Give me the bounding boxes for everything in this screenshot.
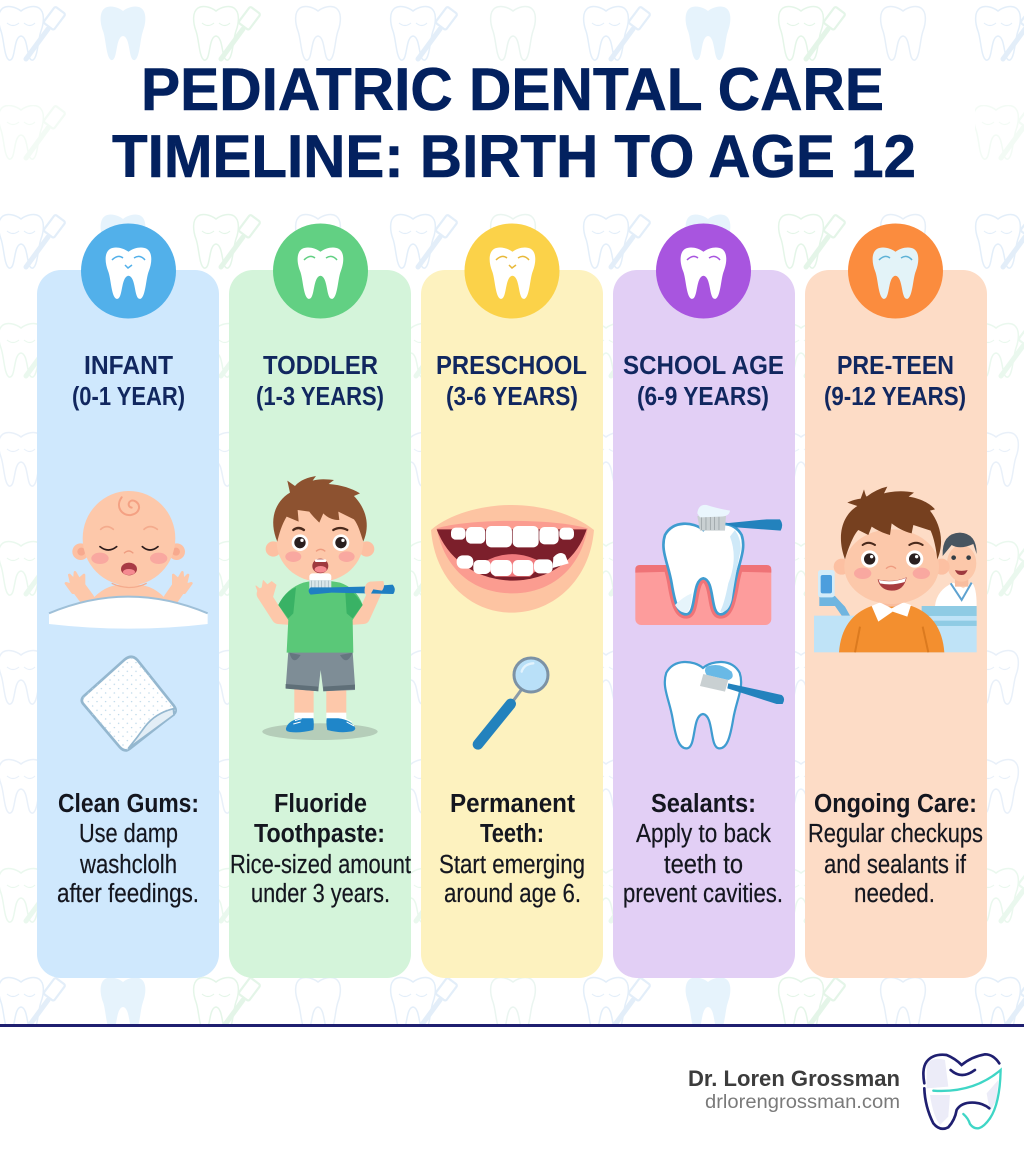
- title: [112, 56, 916, 190]
- toddler panel background: [229, 270, 411, 978]
- school age heading: [623, 352, 784, 411]
- school age tip text: prevent cavities.: [623, 880, 783, 908]
- toddler heading: [256, 352, 384, 411]
- panel: school age: [613, 224, 795, 978]
- icon: infant tooth badge: [81, 224, 176, 318]
- toddler tip text: Toothpaste:: [254, 820, 385, 848]
- illustration: smiling mouth with teeth: [431, 505, 594, 613]
- pre-teen heading: [824, 352, 966, 411]
- school age heading: (6-9 YEARS): [637, 383, 769, 411]
- infant tip text: Use damp: [79, 820, 178, 848]
- footer author name and website: Dr. Loren Grossman: [688, 1066, 900, 1091]
- panel: preschool: [421, 224, 603, 978]
- panel: pre-teen: [805, 224, 987, 978]
- school age heading: SCHOOL AGE: [623, 352, 784, 380]
- illustration: toddler brushing teeth: [256, 476, 395, 740]
- preschool tip text: Teeth:: [480, 820, 544, 848]
- footer author name and website: [688, 1066, 900, 1113]
- pre-teen tip text: Regular checkups: [808, 820, 983, 848]
- toddler tip text: [230, 790, 411, 908]
- pre-teen tip text: needed.: [854, 880, 935, 908]
- school age tip text: [623, 790, 783, 908]
- footer author name and website: drlorengrossman.com: [705, 1092, 900, 1113]
- icon: dental mirror: [478, 658, 548, 744]
- pre-teen tip text: Ongoing Care:: [814, 790, 977, 818]
- toddler tip text: under 3 years.: [251, 880, 390, 908]
- school age tip text: teeth to: [664, 851, 743, 879]
- toddler tip text: Rice-sized amount: [230, 851, 411, 879]
- illustration: sleeping baby: [49, 491, 208, 629]
- preschool heading: PRESCHOOL: [436, 352, 587, 380]
- toddler heading: TODDLER: [263, 352, 378, 380]
- pre-teen tip text: and sealants if: [824, 851, 967, 879]
- preschool tip text: [439, 790, 585, 908]
- icon: tooth logo: [923, 1054, 1001, 1129]
- infant tip text: after feedings.: [57, 880, 199, 908]
- infant tip text: Clean Gums:: [58, 790, 199, 818]
- school age tip text: Apply to back: [636, 820, 771, 848]
- infant heading: [72, 352, 185, 411]
- infant heading: INFANT: [84, 352, 173, 380]
- preschool heading: (3-6 YEARS): [446, 383, 578, 411]
- panel: infant: [37, 224, 219, 978]
- icon: pre-teen tooth badge: [848, 224, 943, 318]
- preschool tip text: Permanent: [450, 790, 575, 818]
- icon: washcloth: [82, 657, 176, 750]
- toddler tip text: Fluoride: [274, 790, 367, 818]
- infant heading: (0-1 YEAR): [72, 383, 185, 411]
- pre-teen panel background: [805, 270, 987, 978]
- preschool tip text: around age 6.: [444, 880, 581, 908]
- school age tip text: Sealants:: [651, 790, 756, 818]
- preschool tip text: Start emerging: [439, 851, 585, 879]
- icon: school age tooth badge: [656, 224, 751, 318]
- pre-teen heading: PRE-TEEN: [837, 352, 954, 380]
- title: PEDIATRIC DENTAL CARE: [141, 56, 884, 123]
- footer: [0, 1024, 1024, 1154]
- infant tip text: [57, 790, 199, 908]
- infant tip text: washclolh: [79, 851, 177, 879]
- illustration: pre-teen boy with dentist: [814, 487, 977, 652]
- school age panel background: [613, 270, 795, 978]
- illustration: sealant on molar: [665, 662, 784, 748]
- preschool panel background: [421, 270, 603, 978]
- icon: toddler tooth badge: [273, 224, 368, 318]
- title: TIMELINE: BIRTH TO AGE 12: [112, 123, 916, 190]
- illustration: tooth in gum with brush: [635, 505, 782, 625]
- pre-teen tip text: [808, 790, 983, 908]
- infant panel background: [37, 270, 219, 978]
- preschool heading: [436, 352, 587, 411]
- icon: preschool tooth badge: [464, 224, 560, 318]
- pre-teen heading: (9-12 YEARS): [824, 383, 966, 411]
- panel: toddler: [229, 224, 411, 978]
- toddler heading: (1-3 YEARS): [256, 383, 384, 411]
